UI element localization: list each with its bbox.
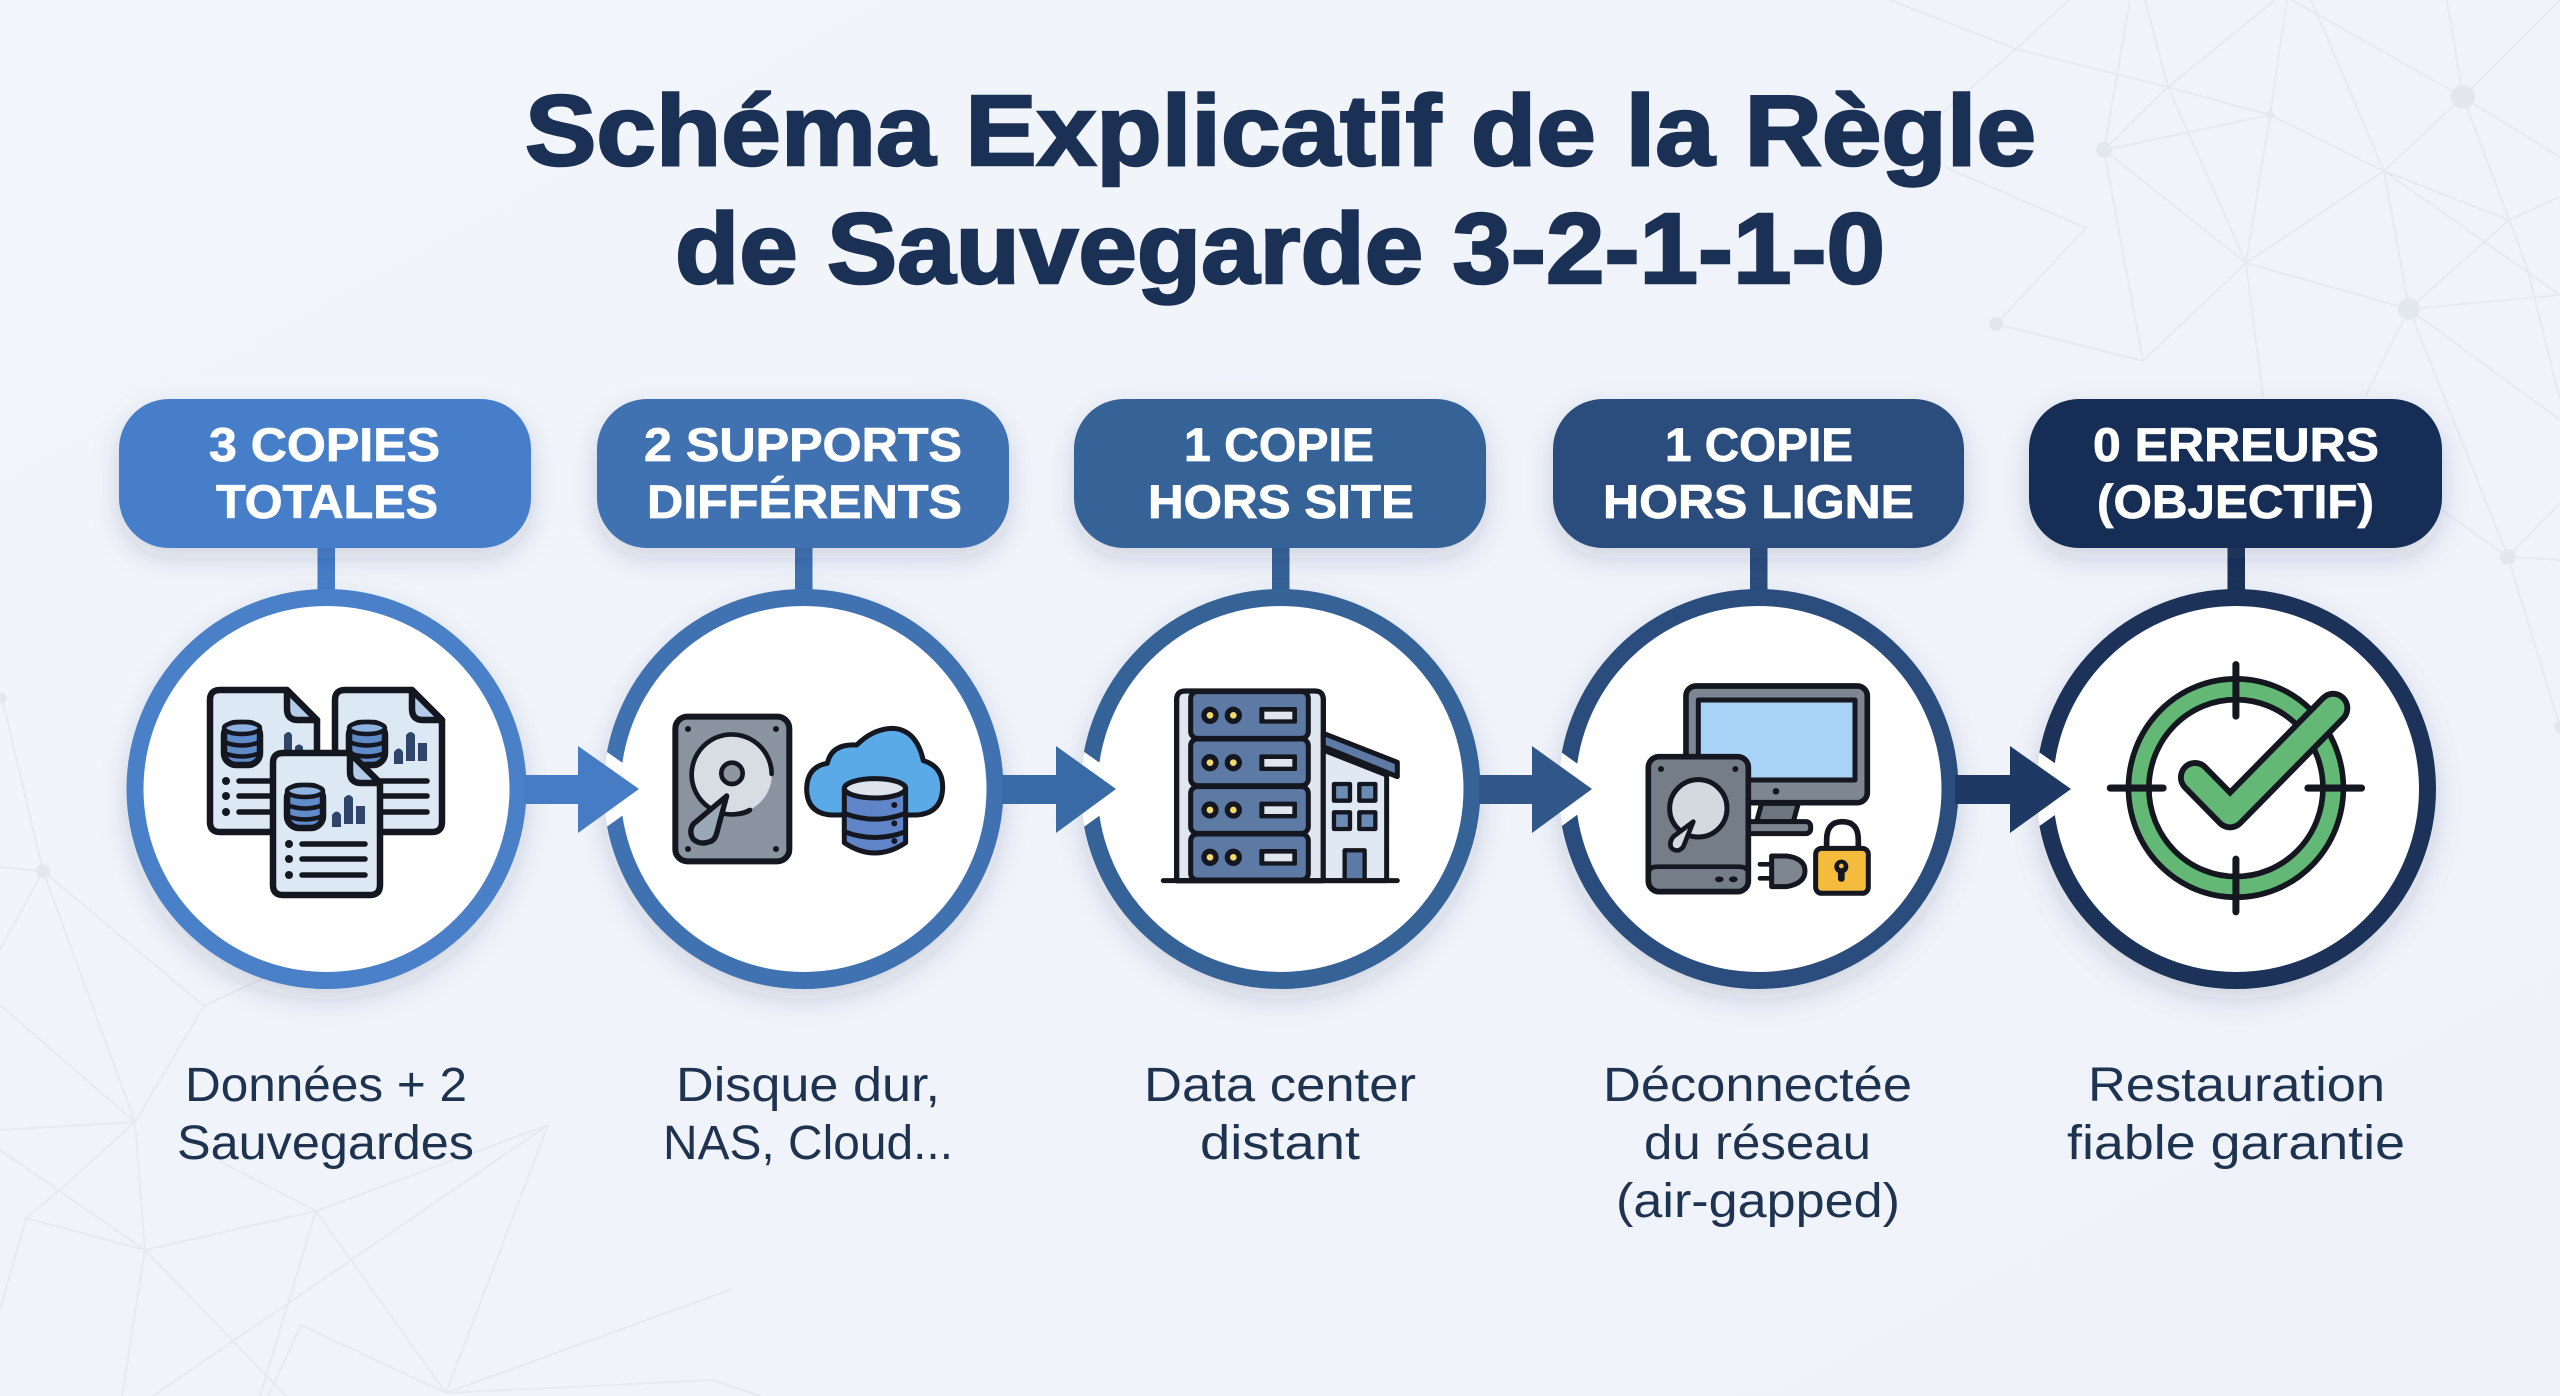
description 4 [1603,1059,1912,1228]
icon: disconnected drive, monitor, plug and padlock [1648,686,1868,893]
icon: target with green check mark [2110,665,2362,912]
description 1: Données + 2 [185,1059,467,1112]
label pill: 2 supports différents [597,399,1009,548]
description 2: NAS, Cloud... [663,1117,953,1170]
description 3: Data center [1144,1059,1416,1112]
circle node 1 [135,598,518,980]
label pill: 3 copies totales [119,399,531,548]
label pill: 0 erreurs objectif: 0 ERREURS [2093,418,2379,471]
arrow 2 to 3 [1002,746,1116,833]
circle node 3 [1089,598,1472,980]
arrow 4 to 5 [1955,746,2071,833]
title [525,75,2036,305]
description 2: Disque dur, [676,1059,940,1112]
arrow 1 to 2 [524,746,639,833]
icon: hard disk and cloud database [675,717,943,861]
circle node 5 [2044,598,2428,980]
label pill: 2 supports différents: 2 SUPPORTS [644,418,962,471]
description 1: Sauvegardes [177,1117,474,1170]
step 1: 3 copies totales [119,399,531,1170]
icon: three data documents [210,690,442,895]
label pill: 2 supports différents: DIFFÉRENTS [647,475,962,528]
title: de Sauvegarde 3-2-1-1-0 [675,193,1885,305]
circle node 4 [1567,598,1950,980]
description 5: fiable garantie [2067,1117,2405,1170]
label pill: 1 copie hors site: HORS SITE [1148,475,1414,528]
title: Schéma Explicatif de la Règle [525,75,2036,187]
label pill: 0 erreurs objectif: (OBJECTIF) [2097,475,2374,528]
description 5 [2067,1059,2405,1170]
description 3 [1144,1059,1416,1170]
icon: server rack and building [1163,691,1397,881]
label pill: 1 copie hors ligne [1553,399,1964,548]
description 3: distant [1200,1117,1360,1170]
description 5: Restauration [2088,1059,2385,1112]
step 5: 0 erreurs objectif [2029,399,2442,1170]
description 4: Déconnectée [1603,1059,1912,1112]
description 4: du réseau [1644,1117,1871,1170]
description 2 [663,1059,953,1170]
label pill: 1 copie hors site: 1 COPIE [1184,418,1374,471]
label pill: 3 copies totales: 3 COPIES [209,418,440,471]
step 4: 1 copie hors ligne [1553,399,1964,1228]
label pill: 1 copie hors ligne: 1 COPIE [1665,418,1853,471]
step 3: 1 copie hors site [1074,399,1486,1170]
description 1 [177,1059,474,1170]
label pill: 1 copie hors ligne: HORS LIGNE [1603,475,1914,528]
arrow 3 to 4 [1479,746,1592,833]
label pill: 3 copies totales: TOTALES [216,475,438,528]
description 4: (air-gapped) [1616,1175,1900,1228]
circle node 2 [612,598,995,980]
label pill: 0 erreurs objectif [2029,399,2442,548]
label pill: 1 copie hors site [1074,399,1486,548]
step 2: 2 supports différents [597,399,1009,1170]
